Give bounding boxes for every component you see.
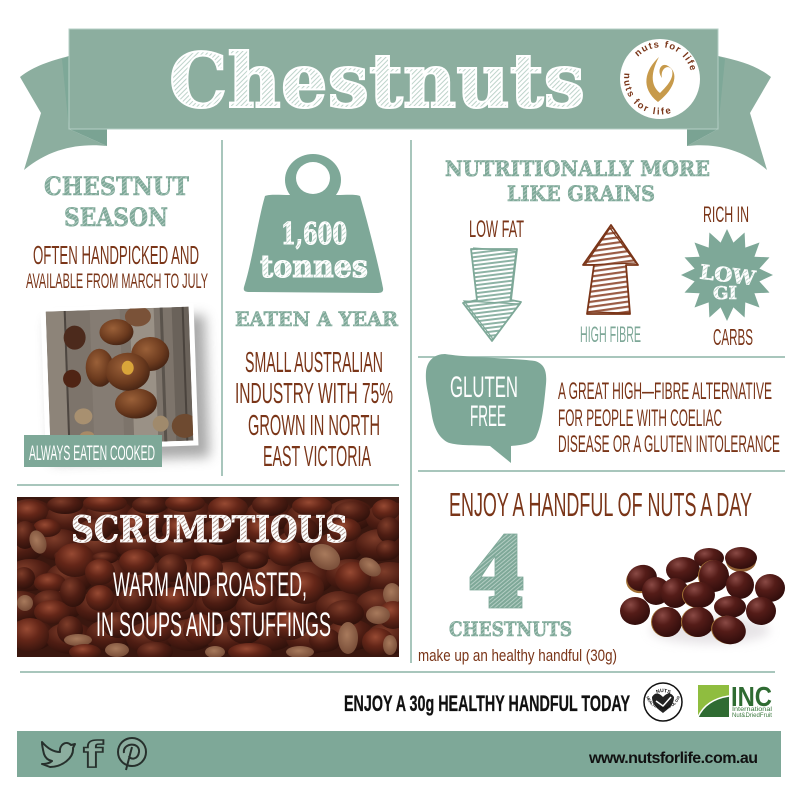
ribbon left tail — [20, 56, 107, 170]
text: warm and roasted — [96, 566, 331, 644]
photo: chestnuts background — [17, 497, 399, 657]
heading: chestnut season — [44, 172, 189, 232]
heading: scrumptious: SCRUMPTIOUS — [71, 509, 348, 551]
text: gluten free description — [558, 378, 780, 458]
panel: chestnut season — [24, 172, 210, 467]
panel: nutritionally more like grains — [445, 156, 773, 350]
icon: down arrow — [463, 248, 521, 341]
logo: nuts for life: nuts for life — [624, 74, 671, 114]
text: warm and roasted: WARM AND ROASTED, — [113, 566, 307, 604]
footer bar — [17, 731, 781, 777]
label: carbs: CARBS — [713, 324, 753, 350]
label: low fat: LOW FAT — [469, 216, 524, 243]
text: industry description: GROWN IN NORTH — [248, 410, 380, 442]
logo: nuts for life — [620, 39, 700, 119]
heading: nutritionally more like grains — [445, 156, 710, 206]
heading: nutritionally more like grains: NUTRITIONALLY MORE — [445, 156, 710, 181]
title: Chestnuts — [169, 37, 585, 125]
panel: 1,600 tonnes — [235, 154, 398, 473]
stat: 1,600 tonnes: 1,600 — [281, 217, 347, 252]
text: season description: AVAILABLE FROM MARCH TO JULY — [26, 270, 208, 293]
stat: 1,600 tonnes — [260, 217, 368, 285]
logo: nuts for life: nuts for life — [635, 41, 695, 70]
speech bubble: gluten free: FREE — [470, 400, 506, 433]
icon: facebook: f — [83, 735, 103, 776]
number: 4 — [470, 534, 523, 608]
icon: up arrow — [583, 225, 638, 314]
ribbon right tail — [687, 56, 771, 170]
logo: INC — [698, 681, 772, 719]
icon: low gi starburst — [681, 229, 773, 321]
text: healthy handful: make up an healthy handful (30g) — [418, 646, 617, 665]
logo: healthy handful badge: NUTS — [656, 688, 671, 694]
logo: healthy handful badge — [643, 682, 683, 722]
icon: twitter — [42, 742, 75, 767]
text: warm and roasted: IN SOUPS AND STUFFINGS — [96, 606, 331, 644]
dividers — [17, 140, 785, 672]
caption: always eaten cooked — [24, 435, 162, 467]
text: industry description: EAST VICTORIA — [263, 441, 371, 473]
icon: low gi starburst: GI — [713, 283, 737, 304]
label: rich in: RICH IN — [703, 202, 749, 227]
panel: nutritionally more like grains: HIGH FIBRE — [580, 322, 641, 347]
tagline: enjoy a 30g healthy handful today: ENJOY A 30g HEALTHY HANDFUL TODAY — [344, 691, 630, 716]
text: industry description: SMALL AUSTRALIAN — [245, 347, 383, 379]
caption: always eaten cooked: ALWAYS EATEN COOKED — [29, 442, 155, 465]
logo: healthy handful badge: HEALTHY HANDFUL DAILY — [646, 696, 680, 710]
text: website url: www.nutsforlife.com.au — [588, 750, 758, 767]
text: season description: OFTEN HANDPICKED AND — [33, 240, 199, 270]
heading: chestnuts: CHESTNUTS — [449, 617, 572, 641]
speech bubble: gluten free — [426, 354, 546, 463]
icon: weight — [244, 154, 383, 293]
ribbon banner — [69, 29, 718, 129]
logo: INC: International — [732, 707, 772, 713]
heading: nutritionally more like grains: LIKE GRAINS — [507, 181, 655, 206]
speech bubble: gluten free: GLUTEN — [450, 371, 518, 404]
logo: INC: INC — [731, 681, 772, 712]
heading: eaten a year: EATEN A YEAR — [235, 307, 398, 331]
icon: low gi starburst: LOW — [698, 260, 757, 290]
panel: scrumptious — [17, 497, 399, 657]
text: season description — [26, 240, 208, 293]
logo: INC: Nut&DriedFruit — [732, 713, 772, 719]
stat: 1,600 tonnes: tonnes — [260, 249, 368, 285]
panel: handful of nuts — [418, 486, 785, 665]
heading: chestnut season: SEASON — [64, 203, 168, 232]
text: industry description: INDUSTRY WITH 75% — [235, 378, 393, 410]
heading: chestnut season: CHESTNUT — [44, 172, 189, 201]
photo: handful of chestnuts — [620, 547, 785, 648]
header ribbon — [20, 29, 771, 170]
text: industry description — [235, 347, 393, 473]
icon: pinterest — [118, 738, 146, 770]
panel: gluten free — [426, 354, 780, 463]
photo: roasted chestnuts — [24, 302, 210, 467]
